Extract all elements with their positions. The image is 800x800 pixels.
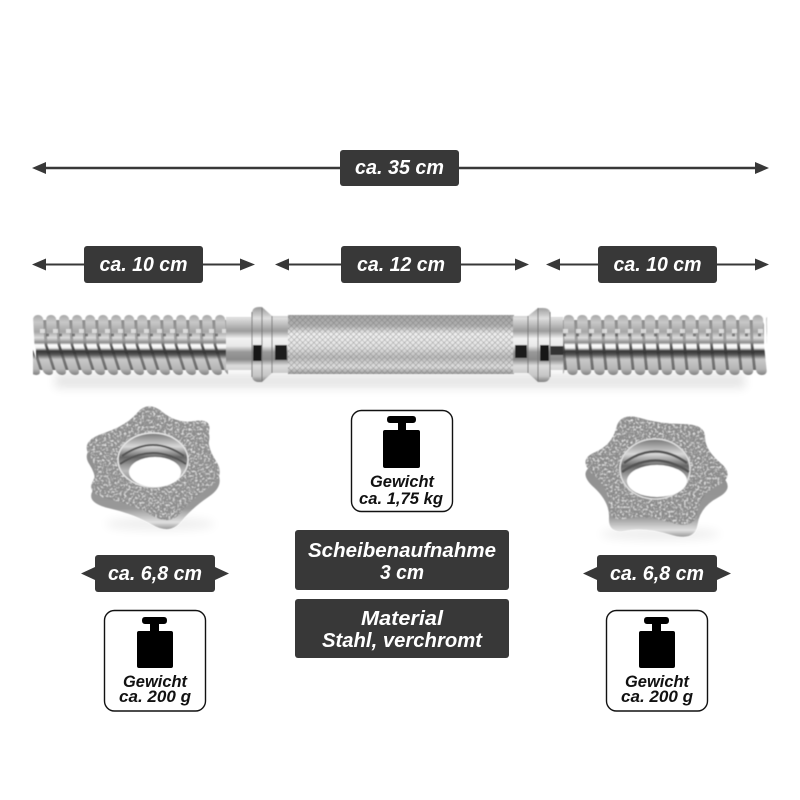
- icon: weight: [639, 617, 675, 668]
- right thread: [556, 315, 767, 375]
- dimension: left thread 10 cm: ca. 10 cm: [100, 254, 188, 276]
- left thread: [33, 315, 232, 375]
- dimension: left thread 10 cm: [32, 246, 255, 283]
- dimension: left nut 6,8 cm: [81, 555, 229, 592]
- weight card: right nut 200 g: [606, 610, 708, 711]
- weight card: right nut 200 g: ca. 200 g: [621, 687, 694, 706]
- weight card: bar 1,75 kg: Gewicht: [370, 472, 435, 491]
- weight card: right nut 200 g: Gewicht: [625, 672, 690, 691]
- info box: Scheibenaufnahme: 3 cm: [380, 562, 424, 584]
- photo: dumbbell bar: [33, 307, 767, 388]
- dimension: grip 12 cm: ca. 12 cm: [357, 254, 445, 276]
- weight card: bar 1,75 kg: ca. 1,75 kg: [359, 489, 444, 508]
- photo: right spinlock nut: [585, 416, 728, 540]
- left sleeve and collar: [226, 307, 289, 382]
- photo: left spinlock nut: [87, 406, 220, 530]
- weight card: left nut 200 g: Gewicht: [123, 672, 188, 691]
- icon: weight: [137, 617, 173, 668]
- dimension: total length 35 cm: ca. 35 cm: [355, 157, 444, 179]
- info box: Material: [295, 599, 509, 658]
- dimension: right thread 10 cm: [546, 246, 769, 283]
- dimension: grip 12 cm: [275, 246, 529, 283]
- dimension: left nut 6,8 cm: ca. 6,8 cm: [108, 563, 202, 585]
- right sleeve and collar: [513, 308, 563, 382]
- info box: Scheibenaufnahme: Scheibenaufnahme: [308, 540, 496, 562]
- weight card: left nut 200 g: ca. 200 g: [119, 687, 192, 706]
- weight card: left nut 200 g: [104, 610, 206, 711]
- info box: Scheibenaufnahme: [295, 530, 509, 590]
- weight card: bar 1,75 kg: [352, 410, 452, 512]
- info box: Material: Material: [361, 608, 443, 630]
- dimension: total length 35 cm: [32, 150, 769, 186]
- dimension: right nut 6,8 cm: [583, 555, 731, 592]
- info box: Material: Stahl, verchromt: [322, 630, 483, 652]
- icon: weight: [383, 416, 420, 468]
- knurled grip: [288, 315, 514, 374]
- dimension: right nut 6,8 cm: ca. 6,8 cm: [610, 563, 704, 585]
- dimension: right thread 10 cm: ca. 10 cm: [614, 254, 702, 276]
